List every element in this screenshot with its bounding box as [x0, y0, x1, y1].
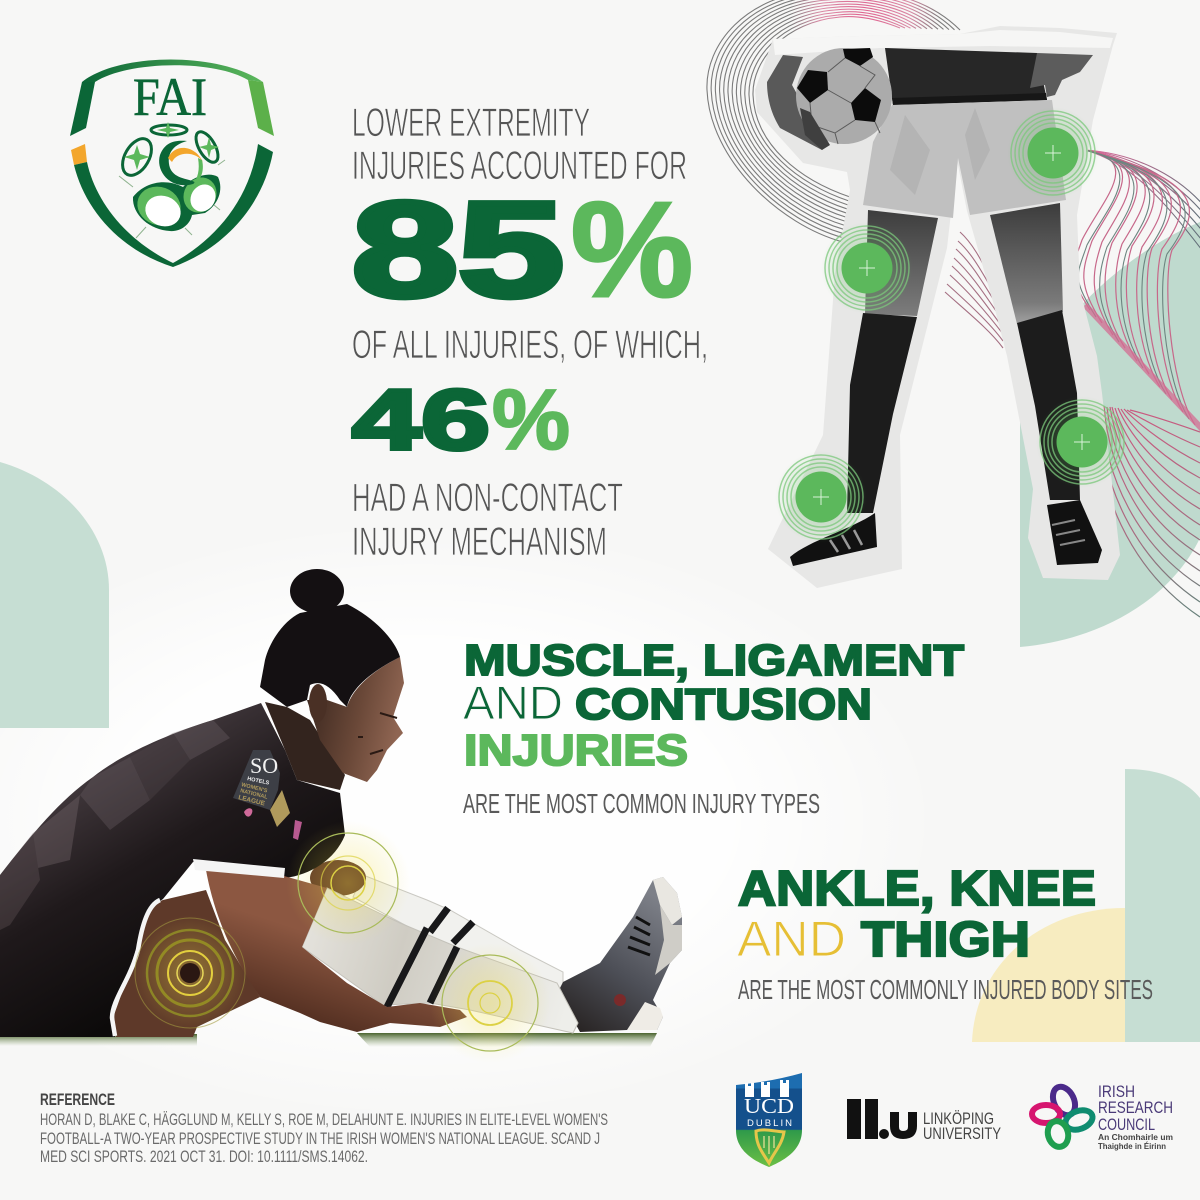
- reference citation: FOOTBALL-A TWO-YEAR PROSPECTIVE STUDY IN THE IRISH WOMEN'S NATIONAL LEAGUE. SCAND J: [40, 1130, 600, 1148]
- heading: ankle, knee and thigh: THIGH: [861, 913, 1030, 967]
- logo: UCD Dublin: DUBLIN: [747, 1118, 792, 1129]
- left sock: [847, 313, 917, 513]
- reference citation: MED SCI SPORTS. 2021 OCT 31. DOI: 10.1111/SMS.14062.: [40, 1148, 368, 1166]
- heading: ankle, knee and thigh: AND: [737, 911, 846, 967]
- right hand on hip: [1030, 53, 1093, 97]
- line art: grey S waves: [1078, 150, 1189, 419]
- league badge: [233, 750, 302, 840]
- logo: Linköping University: LINKÖPING: [923, 1109, 994, 1128]
- heading: muscle, ligament and contusion injuries: INJURIES: [464, 726, 688, 775]
- torn paper cutout: [755, 26, 1120, 588]
- line art: pink convergence band: [1085, 305, 1200, 432]
- knee skin: [310, 860, 366, 896]
- grass strips: [0, 1033, 657, 1047]
- reference citation: HORAN D, BLAKE C, HÄGGLUND M, KELLY S, ROE M, DELAHUNT E. INJURIES IN ELITE-LEVEL WOMEN'S: [40, 1111, 608, 1129]
- background shape: left mint arch: [0, 462, 109, 728]
- right boot: [1047, 500, 1102, 565]
- injury marker: right thigh: [1007, 107, 1099, 199]
- text: lower extremity intro: [352, 101, 687, 188]
- pain rings: shin: [430, 943, 550, 1063]
- face: [307, 657, 404, 782]
- text: lower extremity intro: INJURIES ACCOUNTED FOR: [352, 144, 687, 188]
- council name: An Chomhairle um: [1098, 1133, 1173, 1142]
- heading: ankle, knee and thigh: [737, 862, 1096, 967]
- heading: muscle, ligament and contusion injuries: AND: [463, 676, 563, 729]
- stat: 85 percent: %: [571, 174, 693, 325]
- league badge: HOTELS: [247, 776, 270, 787]
- arm holding ball: [767, 55, 827, 150]
- football: [796, 48, 892, 144]
- council name: COUNCIL: [1098, 1115, 1155, 1134]
- jersey and shorts: [0, 703, 345, 1037]
- background shape: yellow quarter circle: [972, 908, 1125, 1042]
- player shorts: [863, 100, 1066, 218]
- logo: UCD Dublin: UCD: [744, 1094, 794, 1118]
- league badge: WOMEN'S: [241, 782, 268, 794]
- heading: muscle, ligament and contusion injuries: MUSCLE, LIGAMENT: [464, 636, 964, 685]
- right thigh: [990, 203, 1063, 324]
- text: non-contact mechanism: [352, 476, 623, 564]
- statistic text block: 85% and 46%: [352, 101, 708, 564]
- council name: IRISH: [1098, 1082, 1135, 1101]
- left thigh: [865, 210, 938, 316]
- arm reaching to shin: [206, 870, 467, 1032]
- subtext: most common injury types: ARE THE MOST COMMON INJURY TYPES: [463, 788, 820, 819]
- council knot symbol: [1032, 1083, 1095, 1149]
- crest lettering: FAI: [133, 67, 207, 127]
- logo: Linköping University: UNIVERSITY: [923, 1124, 1001, 1143]
- sock stripes: [387, 908, 473, 1007]
- photo: seated player holding her leg: [0, 569, 682, 1063]
- logo: FAI crest: [70, 60, 274, 267]
- sleeve hem: [193, 859, 285, 878]
- soft white glow behind seated player: [0, 520, 940, 1120]
- council name: [1098, 1082, 1173, 1151]
- shorts folds: [890, 108, 990, 195]
- photo collage: standing player legs with ball: [755, 26, 1120, 588]
- pain rings: thigh: [132, 915, 248, 1031]
- line art: lower nested arcs: [1095, 405, 1200, 617]
- rear sock: [353, 875, 563, 990]
- torn white top edge: [773, 30, 1113, 55]
- league badge: SO: [250, 753, 278, 778]
- ear: [309, 684, 327, 722]
- line art: pink S waves: [1073, 150, 1195, 425]
- facial features: [358, 713, 397, 754]
- hair: [260, 604, 400, 707]
- background shape: bottom right mint panel: [1125, 769, 1200, 1042]
- thigh: [114, 890, 260, 1037]
- league badge: LEAGUE: [238, 794, 266, 808]
- council name: Thaighde in Éirinn: [1098, 1142, 1166, 1151]
- text: of all injuries: OF ALL INJURIES, OF WHICH,: [352, 323, 708, 367]
- logo: Irish Research Council: [1032, 1082, 1173, 1151]
- pain rings: knee: [286, 821, 410, 945]
- crest football emblem: [117, 122, 225, 238]
- text: non-contact mechanism: HAD A NON-CONTACT: [352, 476, 623, 520]
- heading: muscle, ligament and contusion injuries: [463, 636, 964, 775]
- text: lower extremity intro: LOWER EXTREMITY: [352, 101, 590, 145]
- left boot: [790, 513, 877, 566]
- line art: top right fan: [1085, 150, 1200, 254]
- stat: 46 percent: %: [492, 373, 570, 468]
- injury marker: left thigh: [821, 222, 913, 314]
- text: non-contact mechanism: INJURY MECHANISM: [352, 520, 607, 564]
- stat: 85 percent: 85: [352, 174, 564, 325]
- ball hand fingers: [800, 108, 830, 150]
- stat: 46 percent: [352, 373, 570, 468]
- injury marker: left ankle: [775, 451, 867, 543]
- heading: ankle, knee and thigh: ANKLE, KNEE: [738, 862, 1096, 916]
- hair bun: [290, 569, 344, 613]
- crest shield frame: [70, 60, 274, 267]
- neck: [265, 702, 345, 790]
- injury marker: right shin: [1036, 396, 1128, 488]
- line art: pink hatch between the legs: [945, 232, 1003, 348]
- shorts white trim: [112, 900, 160, 1036]
- right sock: [1017, 310, 1080, 500]
- logo: UCD Dublin: [736, 1073, 802, 1167]
- background shape: right mint quarter circle: [1020, 222, 1200, 647]
- football boot: [558, 877, 682, 1032]
- reference citation: REFERENCE: [40, 1091, 115, 1109]
- stat: 46 percent: 46: [352, 373, 490, 468]
- logo: Linköping University: [847, 1099, 1001, 1143]
- front sock: [302, 888, 578, 1033]
- heading: muscle, ligament and contusion injuries: CONTUSION: [575, 680, 872, 729]
- line art: grey and pink rings: [707, 0, 960, 242]
- jersey facets: [0, 720, 230, 930]
- league badge: NATIONAL: [240, 788, 269, 801]
- reference citation: [40, 1091, 608, 1166]
- stat: 85 percent: [352, 174, 693, 325]
- player shirt: [885, 48, 1047, 105]
- council name: RESEARCH: [1098, 1098, 1173, 1117]
